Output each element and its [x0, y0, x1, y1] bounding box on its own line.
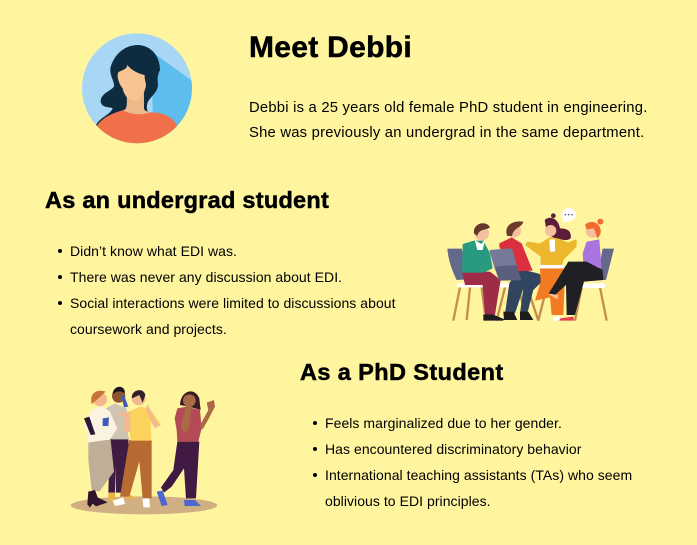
list: PhD experience — [313, 415, 632, 509]
heading: PhD student: As a PhD Student — [300, 359, 504, 385]
text block: introduction: Debbi is a 25 years old female PhD student in engineering. — [249, 100, 648, 116]
icon: Debbi avatar — [82, 33, 192, 144]
list: undergrad experience: coursework and projects. — [70, 321, 227, 337]
heading: undergrad: As an undergrad student — [45, 187, 329, 213]
list: undergrad experience — [58, 243, 396, 337]
list: PhD experience: oblivious to EDI principles. — [325, 493, 491, 509]
list: undergrad experience: There was never any discussion about EDI. — [70, 269, 342, 285]
list: undergrad experience: Social interactions were limited to discussions about — [70, 295, 396, 311]
text block: introduction — [249, 100, 648, 141]
title: Meet Debbi: Meet Debbi — [249, 31, 412, 64]
list: undergrad experience: Didn’t know what EDI was. — [70, 243, 237, 259]
list: PhD experience: Feels marginalized due to her gender. — [325, 415, 562, 431]
list: PhD experience: Has encountered discriminatory behavior — [325, 441, 581, 457]
text block: introduction: She was previously an undergrad in the same department. — [249, 125, 644, 141]
list: PhD experience: International teaching assistants (TAs) who seem — [325, 467, 632, 483]
